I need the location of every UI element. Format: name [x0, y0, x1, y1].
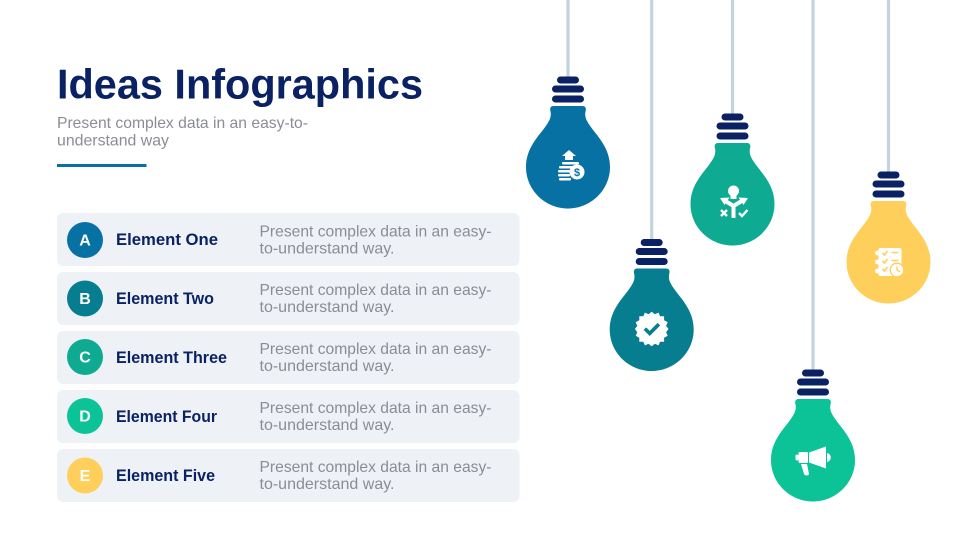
subtitle: Present complex data in an easy-to-	[57, 115, 308, 132]
icon: idea with crossroads arrows	[720, 186, 748, 218]
title accent line	[57, 164, 146, 167]
icon: verified badge	[635, 312, 668, 346]
description: element one: Present complex data in an easy-	[260, 224, 492, 240]
description: element four: Present complex data in an easy-	[260, 400, 492, 417]
description: element two: to-understand way.	[260, 299, 394, 316]
panel: element three	[57, 331, 520, 384]
description: element five: to-understand way.	[260, 476, 394, 493]
badge E	[67, 458, 103, 494]
badge C	[67, 339, 103, 375]
name: element five: Element Five	[116, 466, 215, 485]
badge C: C	[79, 350, 91, 366]
panel: element five	[57, 449, 520, 502]
badge D	[67, 398, 103, 434]
subtitle: understand way	[57, 132, 169, 150]
panel: element two	[57, 272, 520, 325]
icon: coins with arrow	[558, 150, 584, 180]
badge B	[67, 280, 103, 316]
icon: megaphone	[796, 446, 831, 476]
bulb one: blue, coins icon	[526, 0, 610, 208]
description: element one: to-understand way.	[260, 240, 394, 258]
description: element two: Present complex data in an easy-	[260, 282, 492, 299]
description: element three: to-understand way.	[260, 358, 394, 375]
title: Ideas Infographics	[57, 60, 423, 108]
name: element four: Element Four	[116, 407, 217, 426]
panel: element four	[57, 390, 520, 443]
description: element three: Present complex data in an easy-	[260, 341, 492, 358]
description: element four: to-understand way.	[260, 417, 394, 434]
badge D: D	[79, 408, 91, 426]
panel: element one	[57, 213, 520, 266]
name: element two: Element Two	[116, 289, 214, 308]
name: element one: Element One	[116, 230, 218, 249]
bulb five: green, megaphone icon	[771, 0, 855, 502]
badge E: E	[80, 468, 91, 485]
bulb four: teal, badge icon	[610, 0, 694, 371]
bulb two: green-teal, decision icon	[690, 0, 774, 246]
description: element five: Present complex data in an easy-	[260, 459, 492, 476]
bulb three: yellow, checklist icon	[846, 0, 930, 304]
icon: coins with arrow: $	[574, 167, 580, 179]
badge A	[67, 222, 103, 258]
icon: checklist with clock	[875, 248, 904, 277]
badge A: A	[79, 232, 91, 250]
name: element three: Element Three	[116, 348, 227, 367]
badge B: B	[79, 291, 91, 308]
